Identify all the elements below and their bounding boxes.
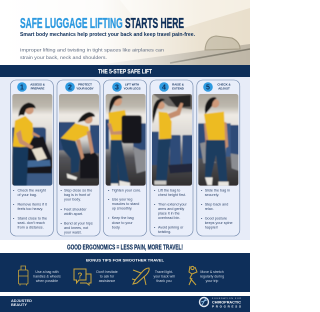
- step 4 bullets: arms and gently: [158, 207, 184, 211]
- step 3 heading: YOUR LEGS: [123, 86, 141, 90]
- step 4 bullets: twisting.: [158, 230, 171, 234]
- logo: Foundation for Chiropractic Progress: PROGRESS: [212, 304, 241, 308]
- steps panel background: [0, 77, 250, 240]
- intro text: [20, 48, 164, 61]
- step 1 card: [10, 80, 55, 236]
- step 4 heading: RAISE &: [172, 82, 184, 86]
- tip 3 text: Travel light-: [155, 270, 173, 274]
- step 4 heading: EXTEND: [172, 86, 184, 90]
- step 3 bullets: •: [108, 188, 110, 192]
- icon: speech bubbles: ?: [78, 272, 83, 280]
- tip 4 text: your trip: [206, 279, 218, 283]
- step 5 bullets: relax.: [205, 207, 214, 211]
- intro text: strain your back, neck and shoulders.: [20, 55, 107, 61]
- logo: Adjusted Beauty: BEAUTY: [11, 302, 27, 307]
- step 5 bullets: keeps your spine: [205, 221, 233, 225]
- step 5 number: 5: [206, 84, 210, 92]
- step 4 bullets: Lift the bag to: [158, 188, 180, 192]
- step 1 bullets: •: [13, 202, 15, 206]
- step 5 card: [196, 80, 241, 236]
- step 5 bullets: •: [201, 202, 203, 206]
- step 2 bullets: your body.: [64, 198, 81, 202]
- step 5 bullets: Good posture: [205, 216, 227, 220]
- step 2 bullets: Feet shoulder: [64, 208, 87, 212]
- step 2 bullets: Step close so the: [64, 188, 92, 192]
- step 2 bullets: Bend at your hips: [64, 222, 93, 226]
- tip 2 text: Don't hesitate: [96, 270, 118, 274]
- step 2 card: [57, 80, 102, 236]
- step 2 heading: YOUR BODY: [76, 86, 94, 90]
- step 1 bullets: from a distance.: [18, 226, 44, 230]
- step 4 bullets: [154, 188, 187, 234]
- step 3 heading: LIFT WITH: [125, 82, 139, 86]
- step 3 bullets: body.: [112, 226, 120, 230]
- step 2 bullets: bag is in front of: [64, 193, 91, 197]
- logo: Foundation for Chiropractic Progress: FOUNDATION FOR: [212, 297, 242, 300]
- step 1 bullets: of your bag.: [18, 193, 37, 197]
- step 3 card: [103, 80, 148, 236]
- step 5 bullets: Slide the bag in: [205, 188, 230, 192]
- step 4 bullets: chest height first.: [158, 193, 186, 197]
- step 4 number: [159, 82, 169, 92]
- step 2 bullets: •: [60, 208, 62, 212]
- step 1 photo: [12, 94, 52, 186]
- step 5 number: [203, 82, 213, 92]
- step 1 bullets: Remove items if it: [18, 202, 47, 206]
- step 5 bullets: •: [201, 216, 203, 220]
- step 5 bullets: securely.: [205, 193, 219, 197]
- step 1 bullets: Stand close to the: [18, 216, 47, 220]
- tip 4 text: Move & stretch: [200, 270, 224, 274]
- step 4 bullets: •: [154, 226, 156, 230]
- step 3 bullets: up smoothly.: [112, 206, 132, 210]
- step 3 bullets: •: [108, 216, 110, 220]
- tip 3 text: thank you: [156, 279, 172, 283]
- icon: suitcase: [18, 266, 28, 286]
- bonus tips heading: BONUS TIPS FOR SMOOTHER TRAVEL: [86, 258, 165, 262]
- step 2 bullets: •: [60, 222, 62, 226]
- step 5 heading: ADJUST: [218, 86, 230, 90]
- step 3 number: 3: [115, 84, 119, 92]
- bonus tips panel: [0, 253, 250, 292]
- steps banner: [0, 65, 250, 77]
- step 3 bullets: •: [108, 198, 110, 202]
- step 1 bullets: •: [13, 188, 15, 192]
- step 3 photo: [106, 94, 146, 186]
- step 3 bullets: Keep the bag: [112, 216, 134, 220]
- step 5 bullets: [201, 188, 233, 230]
- step 4 bullets: place it in the: [158, 212, 180, 216]
- step 2 bullets: your waist.: [64, 230, 82, 234]
- step 4 photo: [152, 94, 192, 186]
- step 1 bullets: Check the weight: [18, 188, 46, 192]
- step 1 bullets: seat- don't reach: [18, 221, 45, 225]
- logo: Foundation for Chiropractic Progress: [200, 297, 242, 308]
- step 4 number: 4: [162, 84, 166, 92]
- tip 2 text: to ask for: [100, 274, 115, 278]
- step 4 bullets: Then extend your: [158, 202, 187, 206]
- step 5 bullets: •: [201, 188, 203, 192]
- step 1 bullets: feels too heavy.: [18, 207, 43, 211]
- header cabin background: [0, 0, 250, 66]
- step 5 heading: CHECK &: [217, 82, 231, 86]
- step 3 bullets: Tighten your core.: [112, 188, 141, 192]
- step 3 bullets: muscles to stand: [112, 202, 139, 206]
- logo: Adjusted Beauty: ADJUSTED: [11, 298, 32, 303]
- step 3 number: [112, 82, 122, 92]
- icon: stretching person: [189, 266, 197, 285]
- logo: Foundation for Chiropractic Progress: CHIROPRACTIC: [212, 300, 241, 304]
- footer bar: [0, 296, 250, 312]
- step 4 card: [150, 80, 195, 236]
- step 4 bullets: overhead bin.: [158, 216, 180, 220]
- step 1 heading: PREPARE: [31, 86, 44, 90]
- step 1 number: 1: [20, 84, 24, 92]
- logo: Adjusted Beauty: [11, 298, 32, 307]
- subtitle: Smart body mechanics help protect your back and keep travel pain-free.: [20, 32, 196, 38]
- step 3 bullets: Use your leg: [112, 198, 132, 202]
- step 4 bullets: Avoid jerking or: [158, 226, 184, 230]
- step 1 number: [17, 82, 27, 92]
- step 1 heading: ASSESS &: [30, 82, 45, 86]
- step 2 bullets: width apart.: [64, 212, 83, 216]
- title: SAFE LUGGAGE LIFTING STARTS HERE: [20, 16, 184, 32]
- intro text: Improper lifting and twisting in tight spaces like airplanes can: [20, 48, 164, 54]
- tagline: GOOD ERGONOMICS = LESS PAIN, MORE TRAVEL!: [67, 242, 183, 252]
- step 2 number: [65, 82, 75, 92]
- step 1 bullets: •: [13, 216, 15, 220]
- step 2 bullets: [60, 188, 93, 234]
- tip 2 text: assistance: [99, 279, 115, 283]
- step 2 bullets: •: [60, 188, 62, 192]
- step 2 number: 2: [68, 84, 72, 92]
- step 1 bullets: [13, 188, 47, 230]
- step 2 bullets: and knees, not: [64, 226, 88, 230]
- icon: airplane: [132, 268, 149, 285]
- step 4 bullets: •: [154, 188, 156, 192]
- step 5 photo: [198, 94, 238, 186]
- step 3 bullets: close to your: [112, 221, 133, 225]
- tip 1 text: when possible: [36, 279, 58, 283]
- steps banner: THE 5-STEP SAFE LIFT: [98, 70, 152, 76]
- tip 4 text: regularly during: [200, 274, 224, 278]
- tip 3 text: your back will: [153, 274, 175, 278]
- tip 1 text: Use a bag with: [35, 270, 59, 274]
- step 3 bullets: [108, 188, 141, 230]
- step 2 heading: PROTECT: [78, 82, 92, 86]
- step 2 photo: [59, 94, 99, 186]
- step 4 bullets: •: [154, 202, 156, 206]
- step 5 bullets: Step back and: [205, 202, 228, 206]
- icon: speech bubbles: [74, 269, 91, 285]
- tip 1 text: handles & wheels: [33, 274, 61, 278]
- step 5 bullets: happier!: [205, 226, 218, 230]
